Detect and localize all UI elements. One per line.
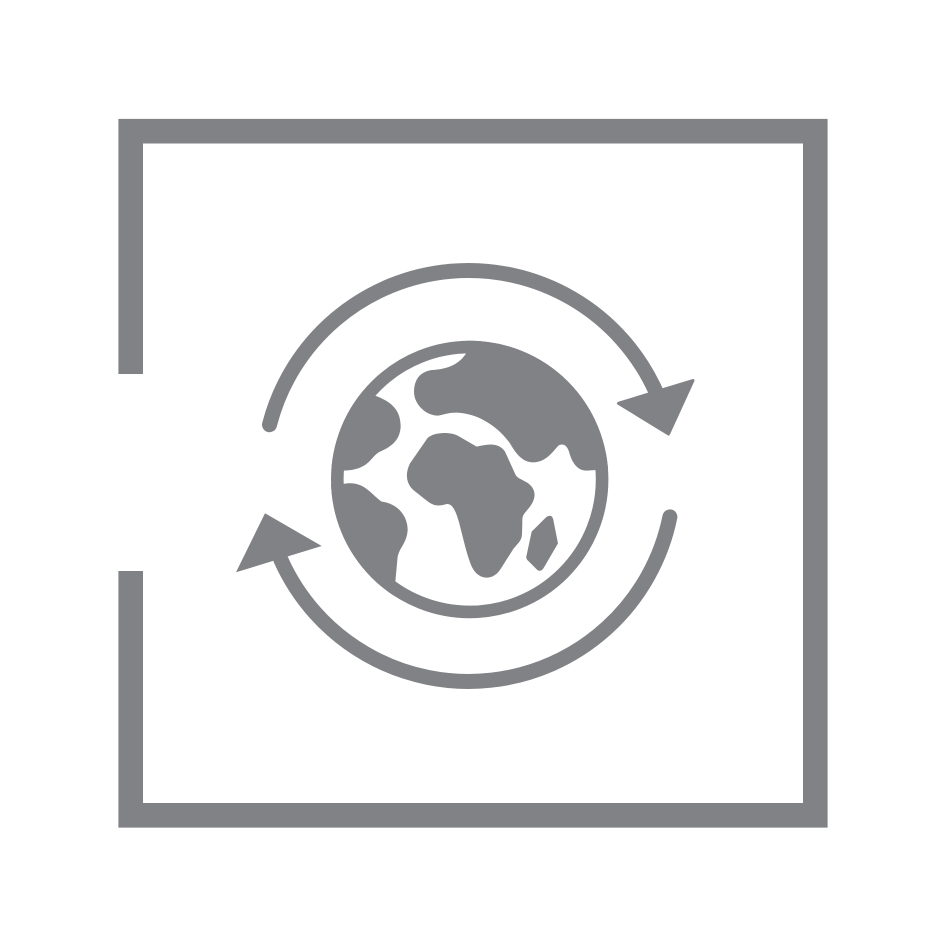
- lower arc: [281, 517, 670, 681]
- arrow: upper clockwise: [270, 270, 693, 434]
- upper arrowhead: [618, 380, 693, 434]
- land: Madagascar: [526, 516, 558, 571]
- arrow: lower clockwise: [236, 513, 670, 681]
- infographic icon: globe with circular arrows in open square: [118, 118, 828, 828]
- land: Africa: [407, 433, 535, 578]
- globe landmasses: [331, 340, 608, 596]
- land: lower left: [331, 483, 408, 596]
- globe outline ring: [337, 347, 602, 612]
- upper arc: [270, 270, 656, 425]
- land: upper left: [327, 396, 401, 471]
- lower arrowhead: [236, 513, 322, 572]
- land: Eurasia: [414, 337, 613, 471]
- icon: globe: [327, 337, 613, 623]
- open square frame: [131, 131, 815, 815]
